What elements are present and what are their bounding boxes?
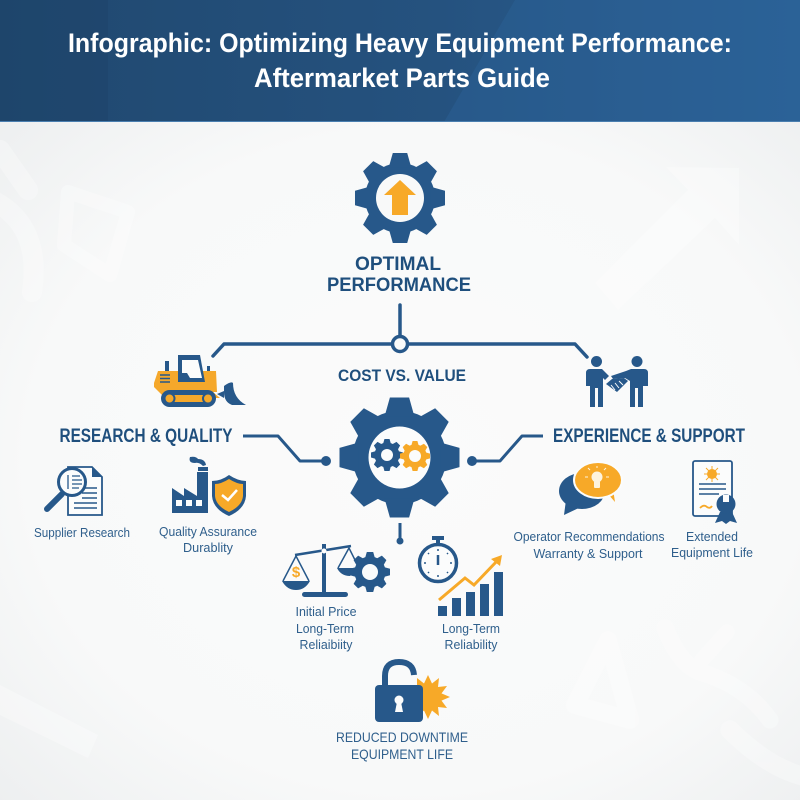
label: extended equipment life xyxy=(671,529,753,560)
icon: bulldozer xyxy=(154,355,246,407)
heading: experience and support: EXPERIENCE & SUPPORT xyxy=(553,426,745,447)
label: extended equipment life: Extended xyxy=(686,529,738,544)
faint background arrows and shapes xyxy=(0,150,800,778)
connector: bottom xyxy=(396,523,404,544)
label: operator recommendations warranty and support: Warranty & Support xyxy=(534,546,643,561)
label: initial price long-term reliability: Initial Price xyxy=(296,604,356,619)
icon: top gear with up arrow xyxy=(355,153,445,243)
heading: optimal performance: PERFORMANCE xyxy=(327,275,471,296)
icon: speech bubbles with lightbulb xyxy=(559,462,622,515)
icon: stopwatch xyxy=(420,536,456,582)
label: long-term reliability: Reliability xyxy=(444,637,498,652)
label: operator recommendations warranty and support xyxy=(514,529,665,561)
heading: research and quality: RESEARCH & QUALITY xyxy=(60,426,233,447)
icon: rising bar chart xyxy=(438,555,503,616)
connector: right xyxy=(468,436,543,464)
label: initial price long-term reliability xyxy=(296,604,356,652)
label: extended equipment life: Equipment Life xyxy=(671,545,753,560)
icon: handshake people xyxy=(586,356,648,407)
header banner xyxy=(0,0,800,122)
label: long-term reliability: Long-Term xyxy=(442,621,500,636)
connector: left xyxy=(243,436,330,464)
heading: optimal performance xyxy=(327,254,471,296)
icon: balance scale and gear: $ xyxy=(292,564,301,581)
title xyxy=(68,28,732,93)
icon: factory and shield xyxy=(172,457,246,516)
label: reduced downtime equipment life: EQUIPMENT LIFE xyxy=(351,746,453,762)
label: reduced downtime equipment life xyxy=(336,729,468,762)
title: Infographic: Optimizing Heavy Equipment Performance: xyxy=(68,28,732,58)
label: operator recommendations warranty and support: Operator Recommendations xyxy=(514,529,665,544)
icon: central gear with two small gears xyxy=(340,398,460,518)
label: initial price long-term reliability: Long-Term xyxy=(296,621,354,636)
label: long-term reliability xyxy=(442,621,500,652)
icon: certificate with wrench ribbon xyxy=(693,461,737,524)
heading: cost vs. value: COST VS. VALUE xyxy=(338,366,466,385)
icon: document and magnifier xyxy=(47,467,102,515)
icon: balance scale and gear xyxy=(282,544,390,597)
label: initial price long-term reliability: Reliaibiity xyxy=(300,637,353,652)
label: quality assurance durability: Quality Assurance xyxy=(159,524,257,539)
label: reduced downtime equipment life: REDUCED DOWNTIME xyxy=(336,729,468,745)
connector: top branch xyxy=(213,305,587,357)
title: Aftermarket Parts Guide xyxy=(254,63,550,93)
heading: optimal performance: OPTIMAL xyxy=(355,254,441,275)
label: supplier research: Supplier Research xyxy=(34,525,130,540)
icon: open lock with starburst xyxy=(375,662,450,722)
label: quality assurance durability: Durablity xyxy=(183,540,233,555)
label: quality assurance durability xyxy=(159,524,257,555)
